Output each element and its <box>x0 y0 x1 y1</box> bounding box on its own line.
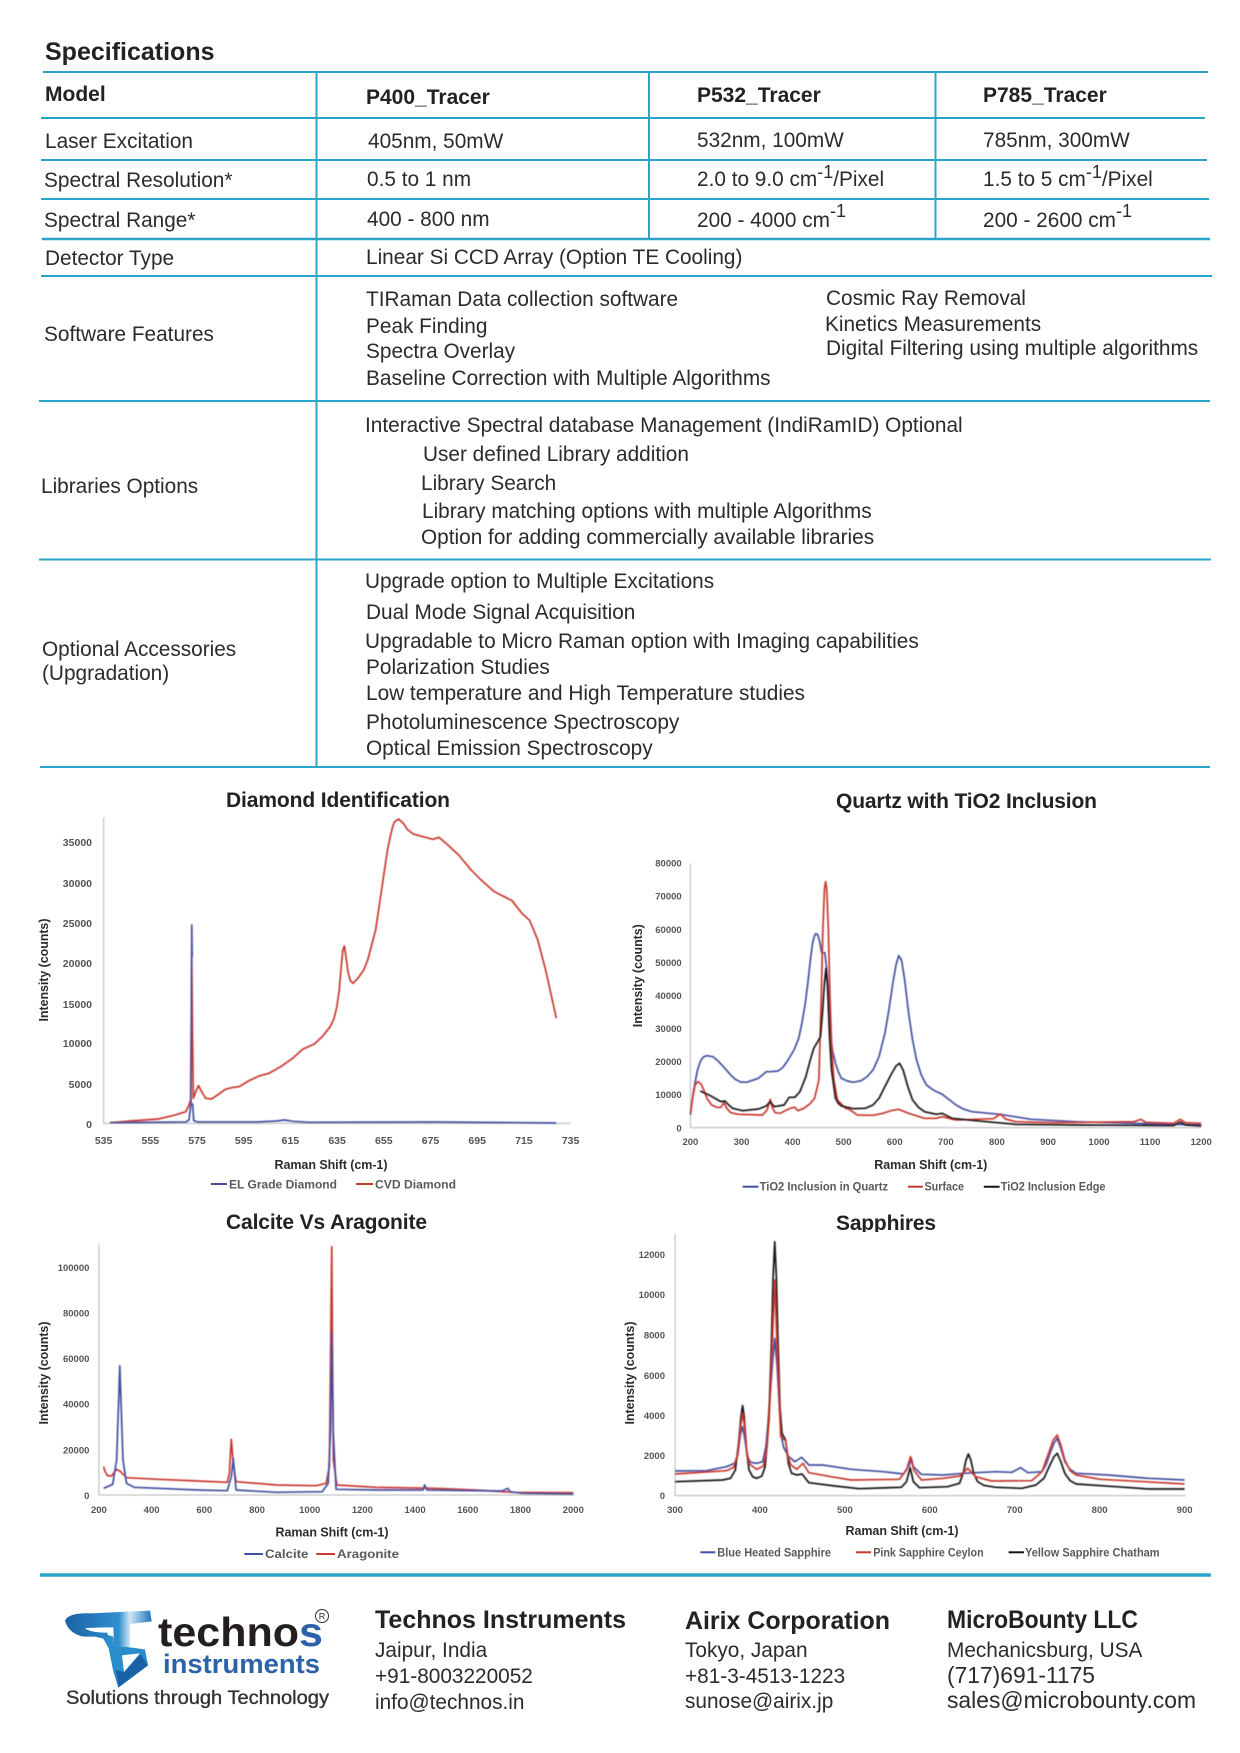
x axis labels: 300 <box>734 1137 749 1148</box>
x axis labels: 500 <box>836 1137 852 1148</box>
x axis labels: 1400 <box>405 1505 426 1516</box>
row: software features <box>44 287 1198 390</box>
x axis labels <box>91 1505 584 1516</box>
y axis labels: 30000 <box>63 878 92 890</box>
row: libraries options: Option for adding commercially available libraries <box>421 526 874 549</box>
row: model header: Model <box>45 83 106 106</box>
row: model header <box>45 83 1107 109</box>
legend: Pink Sapphire Ceylon <box>873 1546 984 1560</box>
y axis labels: 2000 <box>644 1451 665 1462</box>
chart: Calcite Vs Aragonite <box>37 1211 584 1561</box>
plot: diamond spectra <box>104 817 571 1123</box>
x axis labels: 695 <box>468 1135 486 1147</box>
y axis labels: 10000 <box>63 1038 92 1050</box>
contact: Technos Instruments <box>375 1606 626 1714</box>
x axis labels: 735 <box>562 1135 580 1147</box>
y axis labels: 35000 <box>63 837 92 849</box>
y axis labels <box>655 858 682 1134</box>
chart: Sapphires <box>623 1212 1193 1560</box>
chart: Diamond Identification <box>37 789 580 1192</box>
y axis labels: 25000 <box>63 918 92 930</box>
legend <box>211 1178 456 1192</box>
x axis labels: 900 <box>1040 1137 1056 1148</box>
legend <box>743 1180 1106 1194</box>
row: optional accessories: Polarization Studies <box>366 656 550 679</box>
y axis labels: 100000 <box>58 1263 89 1274</box>
logo: technos instruments <box>65 1609 330 1709</box>
row: spectral range: 200 - 4000 cm <box>697 209 830 232</box>
row: detector type: Linear Si CCD Array (Option TE Cooling) <box>366 246 742 269</box>
row: spectral resolution: /Pixel <box>833 168 884 191</box>
title clip mask <box>830 1232 945 1238</box>
y axis labels: 30000 <box>655 1024 682 1035</box>
row: spectral resolution: 1.5 to 5 cm <box>983 168 1086 191</box>
x axis labels: 800 <box>1092 1505 1108 1516</box>
y axis labels: 12000 <box>639 1250 665 1261</box>
row: model header: P532_Tracer <box>697 84 821 107</box>
y axis labels <box>63 837 92 1131</box>
row: libraries options: User defined Library addition <box>423 443 689 466</box>
x axis labels: 1100 <box>1140 1137 1160 1148</box>
y axis labels: 0 <box>676 1123 682 1134</box>
row: spectral resolution: 0.5 to 1 nm <box>367 168 471 191</box>
contact: MicroBounty LLC <box>947 1606 1196 1713</box>
x axis labels: 1000 <box>1088 1137 1110 1148</box>
row: libraries options: Library Search <box>421 472 556 495</box>
y axis labels: 6000 <box>644 1371 665 1382</box>
row: software features: Cosmic Ray Removal <box>826 287 1026 310</box>
y axis labels: 20000 <box>63 1446 89 1456</box>
x axis labels: 1000 <box>299 1505 320 1516</box>
x axis labels: 1200 <box>1191 1137 1212 1148</box>
x axis labels: 700 <box>1007 1505 1023 1516</box>
contact: MicroBounty LLC: Mechanicsburg, USA <box>947 1639 1142 1662</box>
x axis labels: 675 <box>422 1135 439 1147</box>
x axis labels: 555 <box>142 1135 159 1147</box>
row: detector type: Detector Type <box>45 247 174 270</box>
row: libraries options <box>41 414 963 549</box>
heading: Specifications: Specifications <box>45 38 214 66</box>
row: model header: P400_Tracer <box>366 86 490 109</box>
chart: Quartz with TiO2 Inclusion <box>631 790 1212 1194</box>
footer divider <box>40 1573 1211 1577</box>
row: laser excitation: Laser Excitation <box>45 130 193 153</box>
row: spectral resolution <box>44 162 1153 192</box>
row: spectral resolution: -1 <box>817 162 833 182</box>
row: spectral range: -1 <box>1116 201 1132 221</box>
y axis labels: 60000 <box>655 925 682 936</box>
x axis labels: 1800 <box>510 1505 531 1516</box>
row: software features: Kinetics Measurements <box>825 313 1041 336</box>
row: software features: Baseline Correction with Multiple Algorithms <box>366 367 771 390</box>
x axis labels: 400 <box>144 1505 160 1516</box>
row: spectral range: Spectral Range* <box>44 209 195 232</box>
y axis labels: 0 <box>660 1491 665 1502</box>
y axis title: Intensity (counts) <box>37 1322 51 1424</box>
row: optional accessories: Upgradable to Micro Raman option with Imaging capabilities <box>365 630 919 653</box>
row: spectral resolution: Spectral Resolution* <box>44 169 232 192</box>
row: optional accessories: Low temperature and High Temperature studies <box>366 682 805 705</box>
y axis labels: 70000 <box>655 892 682 902</box>
chart title: Calcite Vs Aragonite <box>226 1211 427 1234</box>
row: software features: Digital Filtering using multiple algorithms <box>826 337 1198 360</box>
y axis labels: 20000 <box>63 958 92 970</box>
row: optional accessories: Optical Emission Spectroscopy <box>366 737 653 760</box>
y axis labels: 80000 <box>63 1308 89 1320</box>
legend <box>244 1547 399 1561</box>
x axis labels: 1600 <box>457 1505 478 1516</box>
x axis labels: 2000 <box>563 1505 584 1516</box>
row: spectral range: 400 - 800 nm <box>367 208 490 231</box>
contact: MicroBounty LLC: sales@microbounty.com <box>947 1687 1196 1713</box>
contact: MicroBounty LLC: (717)691-1175 <box>947 1662 1095 1688</box>
legend: EL Grade Diamond <box>229 1178 337 1192</box>
legend: Calcite <box>265 1547 309 1561</box>
x axis labels <box>667 1505 1193 1516</box>
x axis labels: 615 <box>282 1135 299 1147</box>
contact: Airix Corporation: sunose@airix.jp <box>685 1690 833 1713</box>
chart title: Sapphires <box>836 1212 936 1235</box>
contact: Technos Instruments: Jaipur, India <box>375 1639 488 1662</box>
row: optional accessories <box>42 570 919 760</box>
row: laser excitation: 405nm, 50mW <box>368 130 504 153</box>
x axis labels: 400 <box>752 1505 768 1516</box>
y axis labels: 20000 <box>655 1057 682 1068</box>
row: software features: TIRaman Data collection software <box>366 288 678 311</box>
row: software features: Spectra Overlay <box>366 340 516 363</box>
x axis labels: 595 <box>235 1135 253 1147</box>
y axis labels: 40000 <box>63 1400 89 1410</box>
y axis labels: 10000 <box>655 1090 682 1101</box>
contact: Technos Instruments: +91-8003220052 <box>375 1665 533 1688</box>
legend: CVD Diamond <box>375 1178 456 1192</box>
y axis labels: 0 <box>86 1119 92 1131</box>
row: spectral resolution: 2.0 to 9.0 cm <box>697 168 817 191</box>
y axis labels: 10000 <box>639 1290 665 1301</box>
row: detector type <box>45 246 742 270</box>
row: spectral resolution: /Pixel <box>1102 168 1153 191</box>
y axis title: Intensity (counts) <box>631 924 645 1027</box>
y axis labels: 80000 <box>655 858 682 870</box>
row: optional accessories: (Upgradation) <box>42 662 169 685</box>
x axis labels: 900 <box>1177 1505 1193 1516</box>
row: spectral range <box>44 201 1132 232</box>
x axis labels: 600 <box>196 1505 212 1516</box>
x axis labels: 800 <box>989 1137 1005 1148</box>
y axis labels: 8000 <box>644 1330 665 1342</box>
y axis labels <box>58 1263 89 1502</box>
x axis labels: 655 <box>375 1135 393 1147</box>
contact: Airix Corporation <box>685 1607 890 1713</box>
wordmark: technos: technos <box>158 1609 323 1655</box>
contact: Airix Corporation: Airix Corporation <box>685 1607 890 1635</box>
row: optional accessories: Dual Mode Signal Acquisition <box>366 601 635 624</box>
y axis labels: 60000 <box>63 1354 89 1365</box>
plot: quartz spectra <box>690 863 1201 1128</box>
legend: Yellow Sapphire Chatham <box>1025 1546 1160 1560</box>
row: software features: Peak Finding <box>366 315 487 338</box>
chart title: Diamond Identification <box>226 789 450 812</box>
x axis labels <box>682 1137 1212 1148</box>
row: libraries options: Library matching options with multiple Algorithms <box>422 500 872 523</box>
legend: TiO2 Inclusion Edge <box>1001 1180 1106 1194</box>
x axis labels: 635 <box>328 1135 346 1147</box>
contact: Airix Corporation: Tokyo, Japan <box>685 1639 808 1662</box>
y axis labels: 15000 <box>63 999 92 1011</box>
x axis title: Raman Shift (cm-1) <box>276 1526 388 1540</box>
x axis labels: 575 <box>188 1135 206 1147</box>
legend <box>700 1546 1160 1560</box>
icon: blue 3D TS mark <box>65 1611 152 1688</box>
row: spectral range: -1 <box>830 201 846 221</box>
x axis labels: 200 <box>682 1137 698 1148</box>
table: specifications <box>39 72 1212 767</box>
row: optional accessories: Upgrade option to Multiple Excitations <box>365 570 714 593</box>
row: libraries options: Interactive Spectral database Management (IndiRamID) Optional <box>365 414 963 437</box>
row: optional accessories: Photoluminescence Spectroscopy <box>366 711 680 734</box>
x axis title: Raman Shift (cm-1) <box>846 1524 958 1538</box>
row: model header: P785_Tracer <box>983 84 1107 107</box>
x axis labels: 1200 <box>352 1505 373 1516</box>
x axis labels: 300 <box>667 1505 683 1516</box>
y axis labels <box>639 1250 665 1502</box>
plot: sapphire spectra <box>675 1234 1186 1496</box>
y axis labels: 50000 <box>655 958 682 969</box>
x axis labels: 500 <box>837 1505 853 1516</box>
wordmark: instruments: instruments <box>163 1649 320 1679</box>
legend: Blue Heated Sapphire <box>717 1546 831 1560</box>
plot: calcite and aragonite spectra <box>99 1244 574 1495</box>
row: libraries options: Libraries Options <box>41 475 198 498</box>
y axis title: Intensity (counts) <box>37 918 51 1022</box>
legend: TiO2 Inclusion in Quartz <box>760 1180 888 1194</box>
row: laser excitation: 785nm, 300mW <box>983 129 1130 152</box>
chart title: Quartz with TiO2 Inclusion <box>836 790 1097 813</box>
registered mark: R <box>319 1612 326 1622</box>
contact: MicroBounty LLC: MicroBounty LLC <box>947 1606 1138 1634</box>
x axis title: Raman Shift (cm-1) <box>874 1158 987 1172</box>
y axis title: Intensity (counts) <box>623 1322 637 1424</box>
row: laser excitation <box>45 129 1130 153</box>
x axis labels: 700 <box>938 1137 954 1148</box>
y axis labels: 0 <box>84 1491 89 1502</box>
x axis labels: 600 <box>887 1137 903 1148</box>
contact: Technos Instruments: Technos Instruments <box>375 1606 626 1634</box>
x axis labels: 200 <box>91 1505 107 1516</box>
row: spectral range: 200 - 2600 cm <box>983 209 1116 232</box>
x axis labels: 400 <box>785 1137 801 1148</box>
registered mark <box>316 1610 328 1622</box>
x axis labels: 800 <box>249 1505 265 1516</box>
y axis labels: 40000 <box>655 991 682 1002</box>
row: spectral resolution: -1 <box>1086 162 1102 182</box>
legend: Surface <box>924 1180 964 1194</box>
x axis labels: 715 <box>515 1135 533 1147</box>
tagline: Solutions through Technology <box>66 1688 330 1709</box>
x axis labels <box>95 1135 580 1147</box>
row: laser excitation: 532nm, 100mW <box>697 129 844 152</box>
x axis labels: 535 <box>95 1135 113 1147</box>
legend: Aragonite <box>337 1547 399 1561</box>
x axis title: Raman Shift (cm-1) <box>274 1158 388 1172</box>
x axis labels: 600 <box>922 1505 938 1516</box>
contact: Technos Instruments: info@technos.in <box>375 1691 524 1714</box>
row: software features: Software Features <box>44 323 214 346</box>
y axis labels: 5000 <box>69 1079 92 1091</box>
contact: Airix Corporation: +81-3-4513-1223 <box>685 1665 845 1688</box>
row: optional accessories: Optional Accessories <box>42 638 236 661</box>
y axis labels: 4000 <box>644 1411 665 1422</box>
